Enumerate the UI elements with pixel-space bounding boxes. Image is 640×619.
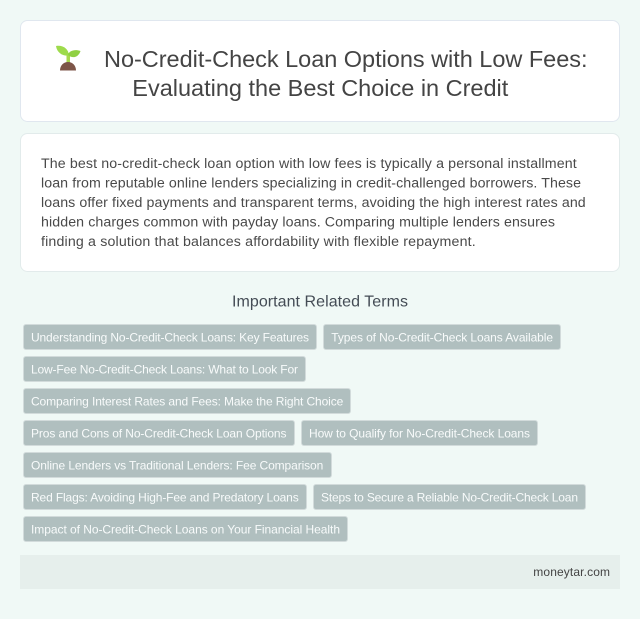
chip: online lenders: Online Lenders vs Traditional Lenders: Fee Comparison (31, 458, 323, 472)
chip: red flags (24, 484, 306, 510)
chip: low-fee: Low-Fee No-Credit-Check Loans: What to Look For (31, 362, 298, 376)
panel: title card (20, 20, 620, 122)
chip: understanding: Understanding No-Credit-Check Loans: Key Features (31, 330, 309, 344)
heading: important related terms: Important Related Terms (232, 294, 408, 310)
panel: summary card (20, 134, 620, 272)
chip: steps: Steps to Secure a Reliable No-Credit-Check Loan (321, 490, 578, 504)
chip: steps (314, 484, 586, 510)
chip: impact (24, 516, 348, 542)
title (104, 46, 588, 101)
summary text: finding a solution that balances affordability with flexible repayment. (41, 234, 476, 250)
title: Evaluating the Best Choice in Credit (132, 75, 509, 101)
summary text (41, 156, 586, 250)
chip: types: Types of No-Credit-Check Loans Available (331, 330, 553, 344)
footer site name: moneytar.com (533, 565, 610, 579)
chip: impact: Impact of No-Credit-Check Loans on Your Financial Health (31, 522, 340, 536)
chip: understanding (24, 324, 316, 350)
chip: red flags: Red Flags: Avoiding High-Fee and Predatory Loans (31, 490, 299, 504)
chip: low-fee (24, 356, 306, 382)
chip: comparing (24, 388, 350, 414)
summary text: hidden charges common with payday loans. Comparing multiple lenders ensures (41, 214, 555, 230)
summary text: loans offer fixed payments and transparent terms, avoiding the high interest rates and (41, 195, 586, 211)
chip: types (324, 324, 560, 350)
chip: comparing: Comparing Interest Rates and Fees: Make the Right Choice (31, 394, 344, 408)
chip: pros and cons (24, 420, 294, 446)
chip: how to qualify (302, 420, 538, 446)
footer (20, 555, 620, 589)
summary text: loan from reputable online lenders specializing in credit-challenged borrowers. These (41, 176, 581, 192)
chip: how to qualify: How to Qualify for No-Credit-Check Loans (309, 426, 530, 440)
summary text: The best no-credit-check loan option with low fees is typically a personal installment (41, 156, 577, 172)
chip: online lenders (24, 452, 332, 478)
icon: sprout (56, 46, 80, 70)
panel: related term chips (24, 324, 586, 542)
title: No-Credit-Check Loan Options with Low Fees: (104, 46, 588, 72)
chip: pros and cons: Pros and Cons of No-Credit-Check Loan Options (31, 426, 286, 440)
